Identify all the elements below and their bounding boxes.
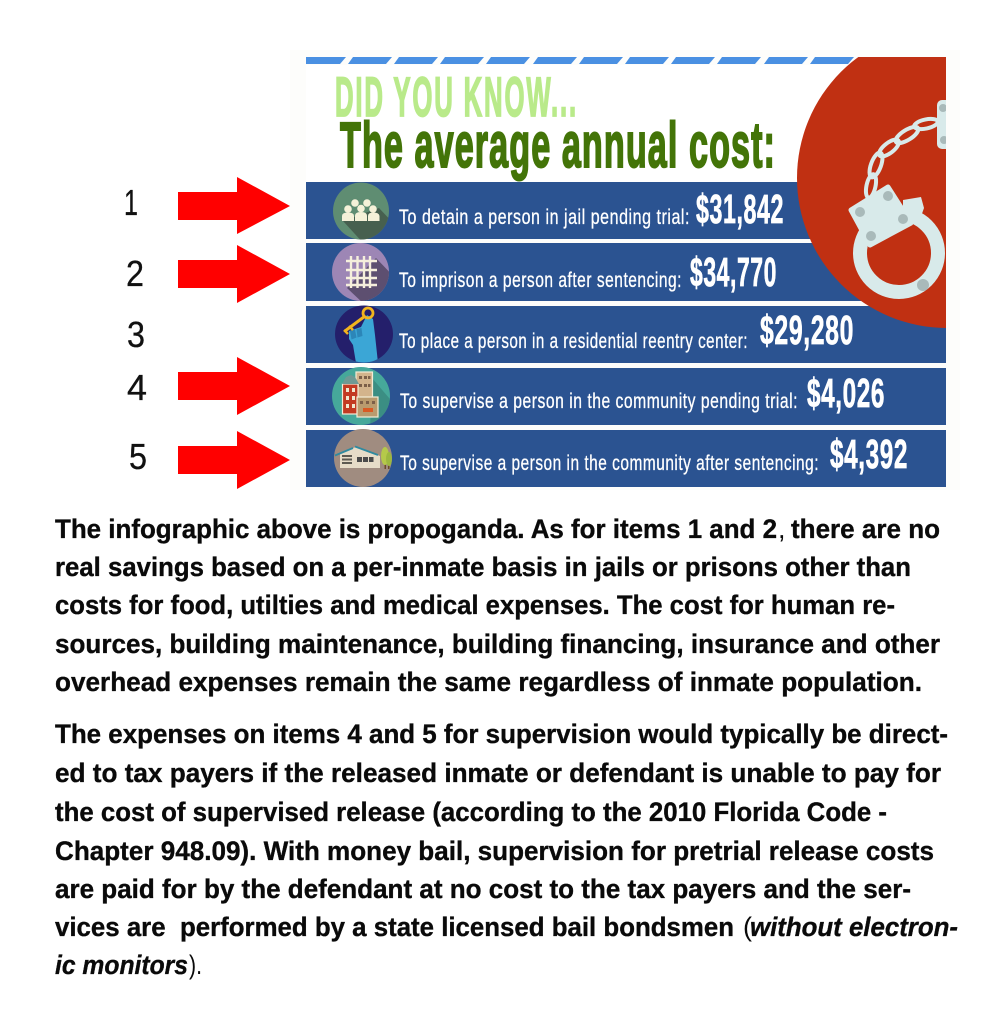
text block: second paragraph: are paid for by the defendant at no cost to the tax payers and the ser- [55, 874, 911, 904]
text block: second paragraph: ). [189, 950, 202, 980]
number 5: 5 [129, 436, 147, 477]
top striped band [306, 57, 854, 64]
text block: second paragraph: vices are performed by a state licensed bail bondsmen [55, 912, 734, 942]
text block: first paragraph: overhead expenses remain the same regardless of inmate population. [55, 667, 922, 697]
row 5 label: To supervise a person in the community after sentencing: [400, 452, 819, 475]
row 1 label: To detain a person in jail pending trial: [399, 206, 690, 229]
infographic page: DID YOU KNOW... [335, 65, 578, 128]
red circle with handcuffs [797, 57, 946, 328]
text block: second paragraph: the cost of supervised release (according to the 2010 Florida Code - [55, 797, 887, 827]
icon: city buildings [332, 367, 390, 425]
arrow 5 [178, 431, 290, 489]
number 1: 1 [124, 182, 138, 223]
blue cost bars [306, 182, 946, 487]
text block: first paragraph: costs for food, utilties and medical expenses. The cost for human re- [55, 590, 895, 620]
number 2: 2 [126, 253, 144, 294]
text block: first paragraph: The infographic above is propoganda. As for items 1 and 2 [55, 514, 777, 544]
arrow 4 [178, 357, 290, 415]
number 3: 3 [127, 314, 145, 355]
text block: first paragraph: real savings based on a per-inmate basis in jails or prisons other than [55, 552, 911, 582]
arrow 2 [178, 245, 290, 303]
number 4: 4 [127, 367, 147, 408]
row 5 amount: $4,392 [830, 431, 908, 477]
text block: first paragraph: , [778, 514, 786, 544]
text block: second paragraph: ic monitors [55, 950, 188, 980]
text block: first paragraph: there are no [791, 514, 940, 544]
icon: key in hand [335, 306, 393, 363]
text block: first paragraph [55, 514, 940, 697]
text block: second paragraph: ( [743, 912, 752, 942]
row 4 label: To supervise a person in the community pending trial: [400, 390, 798, 413]
row 4 amount: $4,026 [807, 370, 885, 416]
text block: second paragraph [55, 719, 958, 980]
text block: second paragraph: without electron- [750, 912, 958, 942]
text block: second paragraph: The expenses on items 4 and 5 for supervision would typically be direct- [55, 719, 948, 749]
row 3 label: To place a person in a residential reentry center: [399, 330, 748, 353]
row 2 label: To imprison a person after sentencing: [399, 269, 682, 292]
text block: second paragraph: Chapter 948.09). With money bail, supervision for pretrial release costs [55, 836, 934, 866]
arrow 1 [178, 177, 290, 234]
row 2 amount: $34,770 [690, 249, 777, 295]
row 3 amount: $29,280 [760, 307, 854, 353]
icon: people [333, 182, 389, 240]
row 1 amount: $31,842 [696, 186, 784, 232]
icon: prison bars [332, 243, 389, 301]
text block: first paragraph: sources, building maintenance, building financing, insurance and other [55, 629, 940, 659]
icon: house [334, 429, 392, 487]
text block: second paragraph: ed to tax payers if the released inmate or defendant is unable to pay for [55, 758, 941, 788]
